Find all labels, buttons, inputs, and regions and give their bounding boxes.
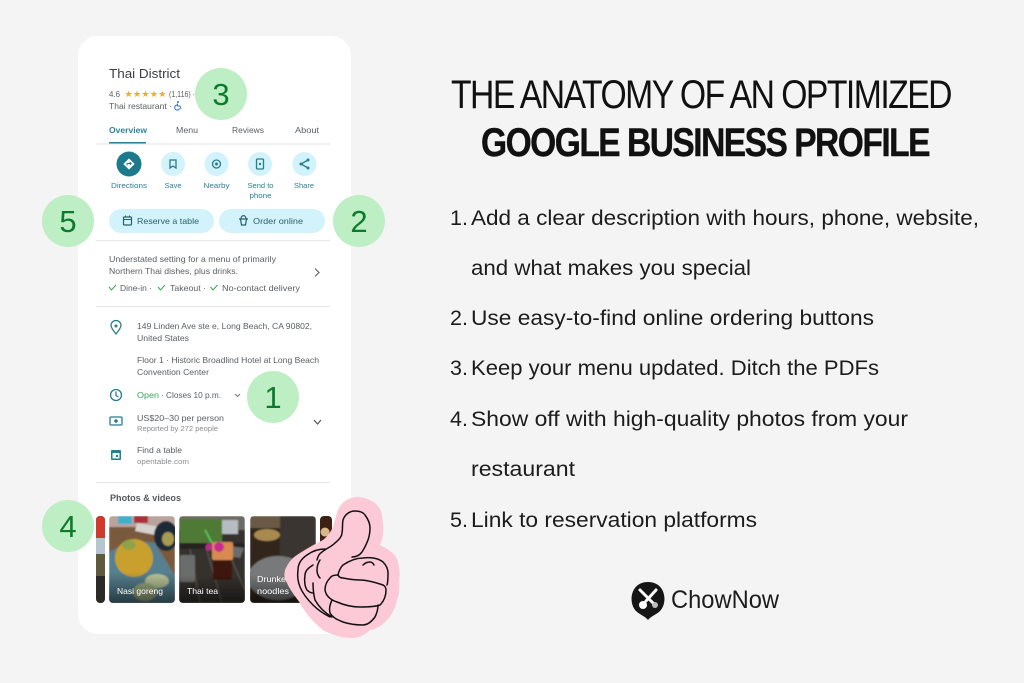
description block: Takeout · [170, 283, 206, 293]
badge 3: 3 [212, 77, 230, 112]
tip 3: 3. [450, 356, 468, 380]
tip 4 [450, 407, 908, 481]
ChowNow logo [632, 582, 780, 620]
title [451, 73, 951, 165]
find a table [111, 445, 189, 466]
business header: 4.6 [109, 89, 120, 99]
business header: (1,116) · [169, 89, 195, 99]
tabs: About [295, 125, 320, 135]
action buttons row [111, 152, 316, 200]
badge 1 [247, 371, 299, 423]
save action [161, 152, 185, 190]
price range [110, 413, 321, 433]
description block: Understated setting for a menu of primarily [109, 254, 277, 264]
directions action: Directions [111, 181, 147, 190]
tip 2: Use easy-to-find online ordering buttons [471, 306, 874, 330]
share action [292, 152, 316, 190]
address details: Floor 1 · Historic Broadlind Hotel at Long Beach [137, 355, 319, 365]
tip 5: 5. [450, 508, 468, 532]
tip 4: restaurant [471, 457, 575, 481]
opening hours: Open [137, 390, 159, 400]
address details [111, 320, 319, 377]
badge 3 [195, 68, 247, 120]
panel: phone profile card [78, 36, 351, 634]
order online button: Order online [253, 216, 303, 226]
tip 2: 2. [450, 306, 468, 330]
ChowNow logo: ChowNow [671, 586, 780, 614]
numbered tips list [450, 206, 979, 532]
tabs [96, 125, 330, 144]
tip 4: 4. [450, 407, 468, 431]
photo: Nasi goreng [109, 516, 178, 603]
description block [109, 254, 319, 293]
price range: Reported by 272 people [137, 426, 218, 433]
badge 5 [42, 195, 94, 247]
nearby action [204, 152, 230, 190]
find a table: Find a table [137, 445, 182, 455]
photo: Drunken noodles: Drunken [257, 574, 291, 584]
photo: partial left [96, 516, 105, 603]
nearby action: Nearby [204, 181, 230, 190]
reserve a table button: Reserve a table [137, 216, 199, 226]
price range: US$20–30 per person [137, 413, 224, 423]
business header: Thai District [109, 67, 181, 81]
tip 5: Link to reservation platforms [471, 508, 757, 532]
directions action [111, 152, 147, 190]
business header [109, 67, 195, 111]
badge 2: 2 [350, 204, 368, 239]
business header: ★★★★★ [124, 89, 166, 99]
order online button [219, 209, 325, 233]
photo: Thai tea: Thai tea [187, 586, 218, 596]
description block: Northern Thai dishes, plus drinks. [109, 266, 238, 276]
photo: Drunken noodles: noodles [257, 586, 289, 596]
photo: Drunken noodles [248, 516, 316, 603]
tip 1: 1. [450, 206, 468, 230]
address details: Convention Center [137, 367, 209, 377]
send to phone action: Send to [248, 181, 274, 190]
badge 5: 5 [59, 204, 77, 239]
icon: fork and spoon pin [632, 582, 664, 620]
badge 1: 1 [264, 380, 282, 415]
reserve a table button [109, 209, 214, 233]
share action: Share [294, 181, 314, 190]
business header: Thai restaurant · [109, 101, 172, 111]
find a table: opentable.com [137, 459, 189, 466]
badge 4 [42, 500, 94, 552]
tip 1 [450, 206, 979, 280]
tabs: Reviews [232, 125, 264, 135]
tabs: Overview [109, 125, 147, 135]
address details: United States [137, 333, 189, 343]
badge 4: 4 [59, 509, 77, 544]
description block: No-contact delivery [222, 283, 301, 293]
tabs: Menu [176, 125, 198, 135]
title: GOOGLE BUSINESS PROFILE [481, 121, 930, 165]
send to phone action: phone [250, 191, 272, 200]
tip 1: and what makes you special [471, 256, 751, 280]
tip 3: Keep your menu updated. Ditch the PDFs [471, 356, 879, 380]
tip 1: Add a clear description with hours, phone, website, [471, 206, 979, 230]
photo: partial right [320, 516, 332, 542]
photo: Thai tea [179, 516, 245, 603]
address details: 149 Linden Ave ste e, Long Beach, CA 90802, [137, 321, 312, 331]
badge 2 [333, 195, 385, 247]
description block: Dine-in · [120, 283, 152, 293]
save action: Save [164, 181, 182, 190]
opening hours: · Closes 10 p.m. [161, 390, 221, 400]
photos heading: Photos & videos [110, 493, 181, 503]
send to phone action [248, 152, 274, 200]
tip 4: Show off with high-quality photos from your [471, 407, 908, 431]
icon: thumbs up sticker [284, 497, 400, 638]
photo: Nasi goreng: Nasi goreng [117, 586, 163, 596]
opening hours [110, 390, 240, 400]
